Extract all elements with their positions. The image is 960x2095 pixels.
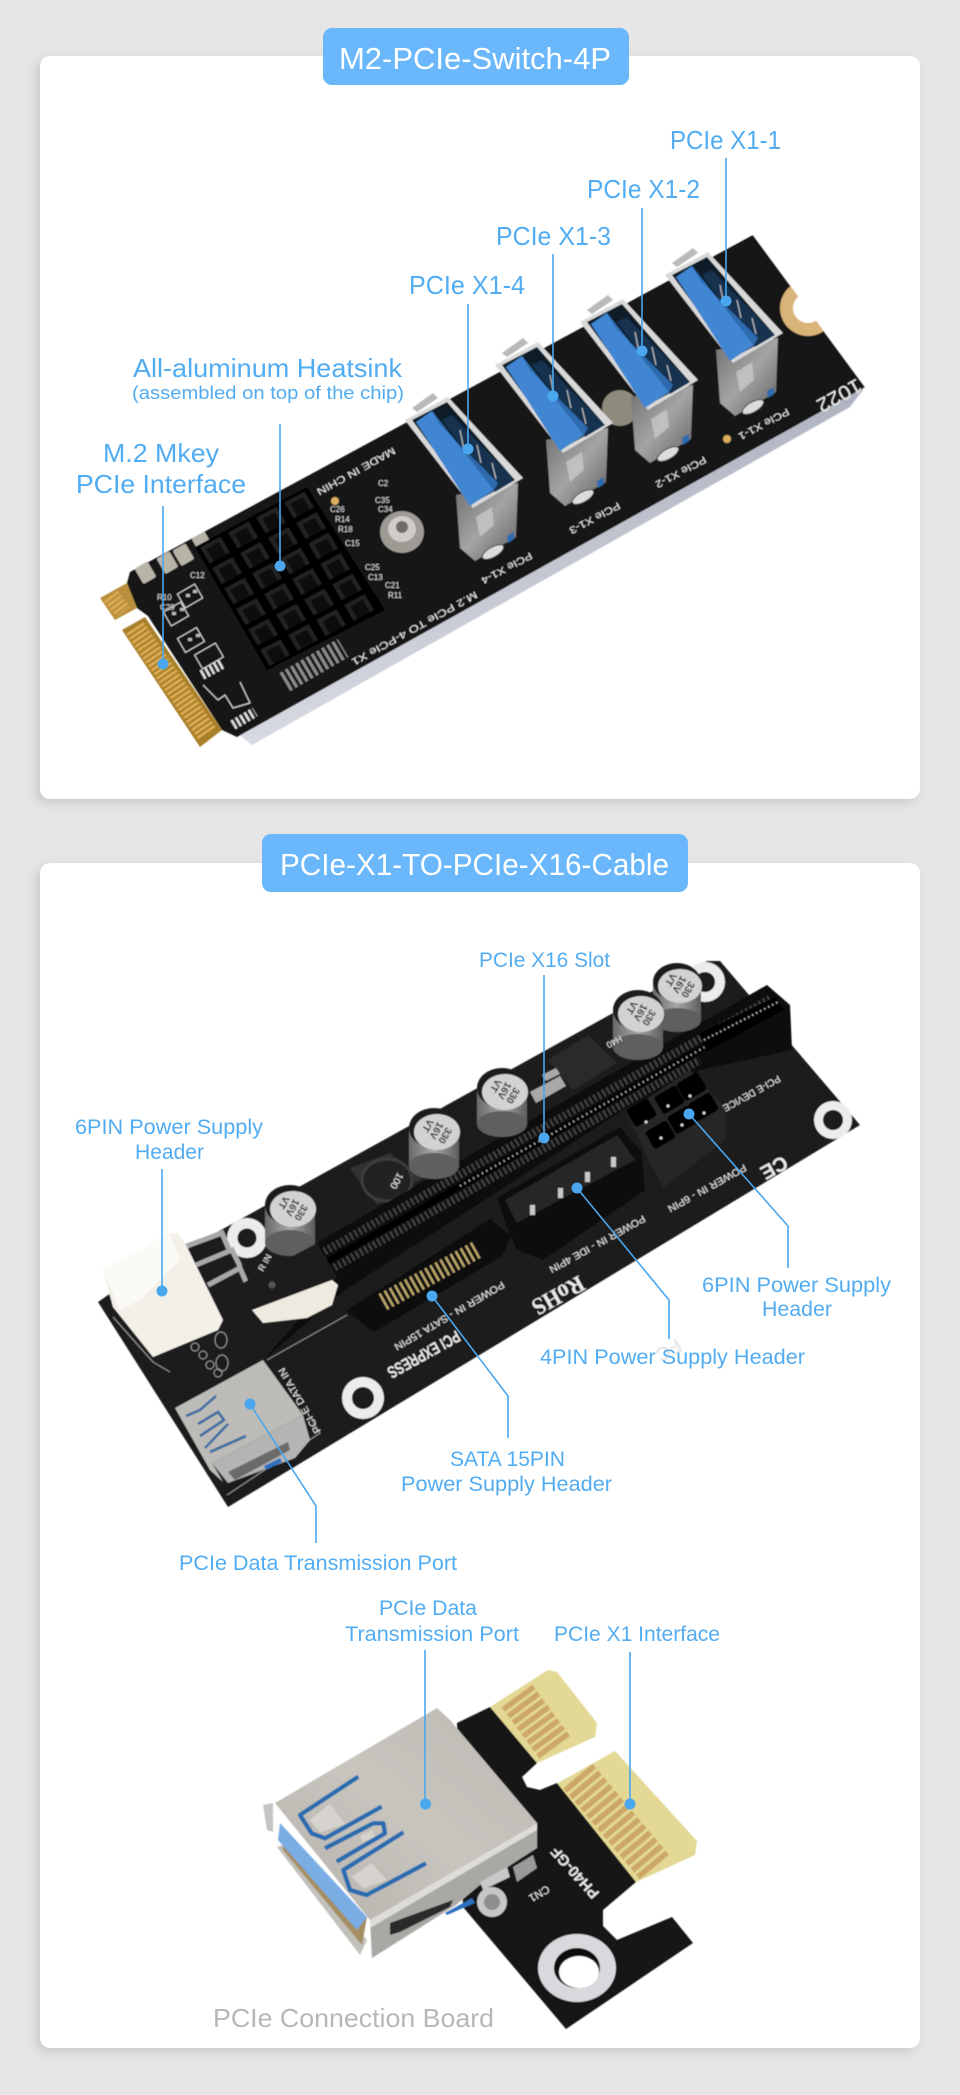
board underside strip xyxy=(237,387,865,745)
label: PCIe Data Transmission Port with leader xyxy=(179,1398,457,1575)
label: All-aluminum Heatsink with leader: All-aluminum Heatsink xyxy=(133,353,403,383)
heading: PCIe-X1-TO-PCIe-X16-Cable: PCIe-X1-TO-PCIe-X16-Cable xyxy=(280,847,669,882)
label: PCIe X1-2 with leader xyxy=(587,174,700,356)
silkscreen text: PCIe X1-2 xyxy=(653,453,708,490)
label: left 6PIN Power Supply Header with leader: 6PIN Power Supply xyxy=(75,1116,264,1139)
label: right 6PIN Power Supply Header with leader: 6PIN Power Supply xyxy=(702,1274,892,1297)
label: PCIe X16 Slot with leader xyxy=(479,949,610,1144)
silkscreen text: M.2 PCIe TO 4-PCIe X1 xyxy=(349,588,479,667)
label: left 6PIN Power Supply Header with leader xyxy=(75,1116,264,1296)
silkscreen text: POWER IN - SATA 15PIN xyxy=(392,1278,506,1352)
standoff behind ports xyxy=(602,390,638,426)
capacitors: 330 xyxy=(291,1202,309,1223)
X16 slot xyxy=(240,985,792,1360)
label: SATA 15PIN Power Supply Header with leader: Power Supply Header xyxy=(401,1473,612,1496)
silkscreen text: MADE IN CHIN xyxy=(315,444,397,497)
label: PCIe X1-1 with leader: PCIe X1-1 xyxy=(670,125,781,155)
silkscreen text: C34 xyxy=(378,505,393,514)
capacitors: 16V xyxy=(426,1120,445,1141)
silkscreen text: R11 xyxy=(388,591,403,600)
silkscreen text: C2 xyxy=(378,479,389,488)
USB connector xyxy=(263,1708,537,1958)
silkscreen text: PCI-E DATA IN xyxy=(277,1365,324,1435)
silkscreen outlines xyxy=(113,1315,347,1495)
capacitors: 330 xyxy=(678,979,696,1000)
silkscreen text: C25 xyxy=(365,563,380,572)
silkscreen text: PH40-GF xyxy=(548,1843,603,1902)
heading: PCIe-X1-TO-PCIe-X16-Cable xyxy=(262,834,688,892)
regulator and inductor: 100 xyxy=(387,1170,405,1191)
label: M.2 Mkey PCIe Interface with leader: M.2 Mkey xyxy=(103,438,219,468)
white 6-pin plug xyxy=(103,1233,246,1357)
label: M.2 Mkey PCIe Interface with leader: PCIe Interface xyxy=(76,469,246,499)
capacitors: 330 xyxy=(435,1125,453,1146)
silkscreen text: PCIe X1-3 xyxy=(567,499,622,536)
silkscreen text: C13 xyxy=(368,573,383,582)
silkscreen text: PCIe X1-4 xyxy=(479,549,534,586)
lower gold fingers xyxy=(556,1751,697,1882)
label: SATA 15PIN Power Supply Header with leader: SATA 15PIN xyxy=(450,1448,565,1471)
label: M.2 Mkey PCIe Interface with leader xyxy=(76,438,246,670)
SATA connector xyxy=(346,1219,511,1332)
silkscreen text xyxy=(256,1033,791,1435)
silkscreen text: C29 xyxy=(160,603,175,612)
image: PCIe connection board xyxy=(263,1670,697,2029)
silkscreen text: POWER IN - IDE 4PIN xyxy=(547,1212,647,1274)
label: PCIe X1 Interface with leader xyxy=(554,1623,720,1810)
small components near connector xyxy=(134,531,343,725)
silkscreen text: R10 xyxy=(157,593,172,602)
heading: M2-PCIe-Switch-4P: M2-PCIe-Switch-4P xyxy=(339,41,611,76)
label: right 6PIN Power Supply Header with leader xyxy=(684,1108,892,1321)
label: left 6PIN Power Supply Header with leader: Header xyxy=(135,1141,204,1164)
slot latch xyxy=(217,1243,338,1362)
capacitors: VT xyxy=(662,971,678,988)
label: PCIe X1-2 with leader: PCIe X1-2 xyxy=(587,174,700,204)
mounting ring xyxy=(538,1934,616,2002)
label: PCIe X1-3 with leader xyxy=(496,221,611,402)
capacitors: VT xyxy=(275,1194,291,1211)
label: 4PIN Power Supply Header with leader xyxy=(540,1182,805,1369)
mounting standoff xyxy=(380,511,424,553)
mounting rings xyxy=(227,962,852,1419)
black PCB xyxy=(457,1707,693,2029)
silkscreen text: H40 xyxy=(605,1033,624,1050)
silkscreen text: C26 xyxy=(330,505,345,514)
upper gold fingers xyxy=(490,1670,597,1763)
capacitors: 330 xyxy=(639,1007,657,1028)
silkscreen text: R IN xyxy=(256,1252,274,1273)
riser PCB xyxy=(98,961,860,1507)
silkscreen text: PCI-E DEVICE xyxy=(720,1072,782,1113)
label: 4PIN Power Supply Header with leader: 4PIN Power Supply Header xyxy=(540,1346,805,1369)
silkscreen text: POWER IN - 6PIN xyxy=(666,1161,748,1214)
4-pin power connector xyxy=(497,1127,645,1260)
heatsink xyxy=(195,487,385,670)
6-pin power socket xyxy=(625,1070,725,1188)
USB data port xyxy=(175,1360,310,1483)
silkscreen text: C12 xyxy=(190,571,205,580)
label: PCIe Data Transmission Port (connection board) with leader: PCIe Data xyxy=(379,1597,477,1620)
label: All-aluminum Heatsink with leader: (assembled on top of the chip) xyxy=(132,383,404,403)
panel: PCIe-X1-TO-PCIe-X16-Cable card xyxy=(40,863,920,2048)
silkscreen text: R18 xyxy=(338,525,353,534)
regulator and inductor xyxy=(350,1035,617,1205)
silkscreen text: C35 xyxy=(375,496,390,505)
capacitors: VT xyxy=(419,1117,435,1134)
caption: PCIe Connection Board: PCIe Connection Board xyxy=(213,2003,494,2033)
silkscreen text: CE xyxy=(756,1151,791,1183)
capacitors xyxy=(265,963,702,1256)
capacitors: VT xyxy=(487,1077,503,1094)
capacitors: 16V xyxy=(630,1002,649,1023)
LEDs xyxy=(331,497,339,505)
PCB body xyxy=(127,235,865,737)
label: PCIe X1-4 with leader xyxy=(409,270,525,454)
capacitors: 16V xyxy=(282,1197,301,1218)
label: PCIe Data Transmission Port (connection board) with leader: Transmission Port xyxy=(345,1623,519,1646)
silkscreen text: 1022 xyxy=(813,374,865,416)
silkscreen text: R14 xyxy=(335,515,350,524)
silkscreen text: RoHS xyxy=(527,1270,589,1320)
label: All-aluminum Heatsink with leader xyxy=(132,353,404,572)
label: PCIe X1-4 with leader: PCIe X1-4 xyxy=(409,270,525,300)
silkscreen text xyxy=(157,374,865,667)
silkscreen text: PCI EXPRESS xyxy=(384,1327,463,1382)
silkscreen text: CN1 xyxy=(526,1882,552,1904)
label: PCIe Data Transmission Port with leader: PCIe Data Transmission Port xyxy=(179,1552,457,1575)
silkscreen text: C21 xyxy=(385,581,400,590)
panel: M2-PCIe-Switch-4P card xyxy=(40,56,920,799)
silkscreen text xyxy=(526,1843,603,1904)
label: right 6PIN Power Supply Header with leader: Header xyxy=(762,1298,832,1321)
capacitors: 16V xyxy=(494,1080,513,1101)
capacitors: 330 xyxy=(503,1085,521,1106)
capacitors: 16V xyxy=(669,974,688,995)
image: M.2 adapter board xyxy=(100,225,900,747)
silkscreen text: FC xyxy=(651,1334,685,1366)
label: PCIe X1-1 with leader xyxy=(670,125,781,306)
silkscreen text: C15 xyxy=(345,539,360,548)
silkscreen text: PCIe X1-1 xyxy=(736,405,791,442)
label: PCIe X16 Slot with leader: PCIe X16 Slot xyxy=(479,949,610,972)
label: SATA 15PIN Power Supply Header with leader xyxy=(401,1290,612,1496)
capacitors: VT xyxy=(623,999,639,1016)
gold edge connector xyxy=(100,583,222,747)
heading: M2-PCIe-Switch-4P xyxy=(323,28,629,85)
label: PCIe Data Transmission Port (connection board) with leader xyxy=(345,1597,519,1810)
USB ports xyxy=(405,248,783,562)
label: PCIe X1 Interface with leader: PCIe X1 Interface xyxy=(554,1623,720,1646)
standoff notch xyxy=(753,225,900,387)
label: PCIe X1-3 with leader: PCIe X1-3 xyxy=(496,221,611,251)
image: PCIe riser board xyxy=(98,961,860,1507)
